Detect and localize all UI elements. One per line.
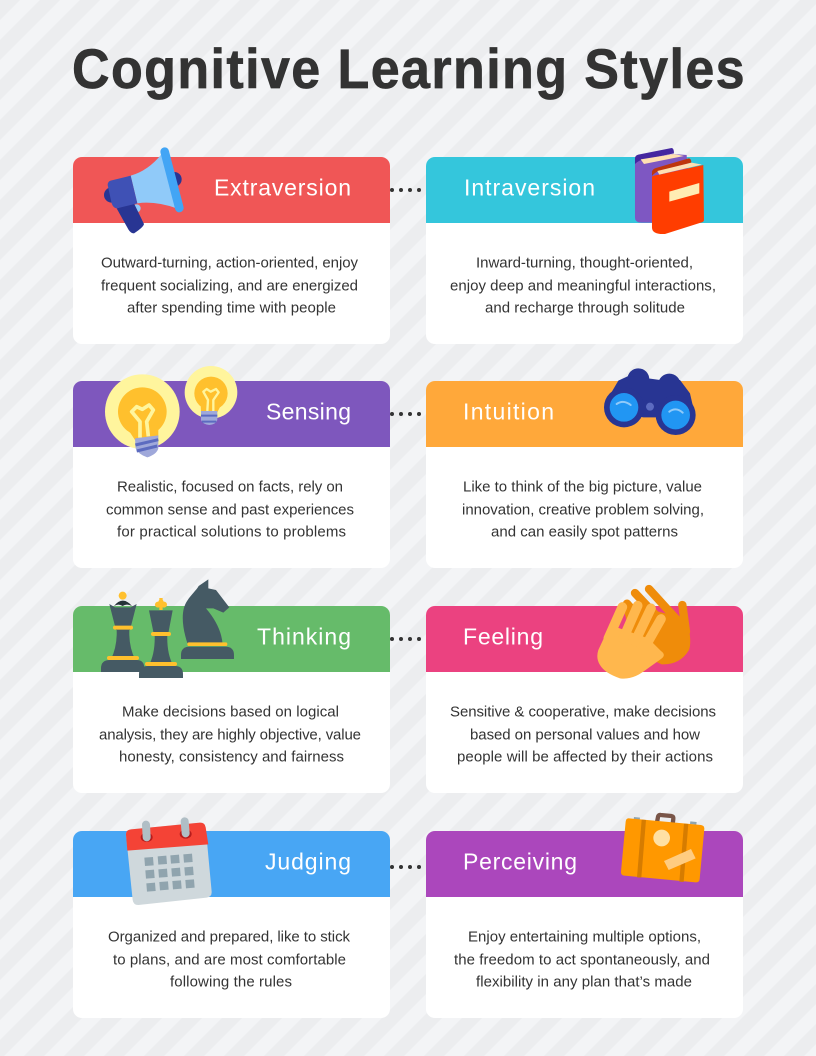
icon: clapping hands	[597, 589, 690, 679]
description: Enjoy entertaining multiple options,	[468, 929, 701, 946]
heading: Thinking	[257, 623, 351, 649]
description: common sense and past experiences	[106, 502, 354, 519]
description: Realistic, focused on facts, rely on	[117, 479, 343, 496]
heading: Feeling	[463, 623, 543, 649]
description: the freedom to act spontaneously, and	[454, 952, 710, 969]
description	[108, 929, 350, 991]
icon: binoculars	[604, 368, 696, 435]
heading: Intuition	[463, 398, 554, 424]
title: Cognitive Learning Styles	[72, 37, 746, 100]
heading: Intraversion	[464, 174, 595, 200]
description: after spending time with people	[127, 300, 336, 317]
description: Sensitive & cooperative, make decisions	[450, 704, 716, 721]
description: Inward-turning, thought-oriented,	[476, 255, 693, 272]
description: innovation, creative problem solving,	[462, 502, 704, 519]
connector: row 4	[390, 865, 421, 869]
icon: megaphone	[104, 152, 182, 233]
panel: Feeling	[426, 589, 743, 793]
description: Like to think of the big picture, value	[463, 479, 702, 496]
panel: Intraversion	[426, 148, 743, 344]
icon: light bulbs	[105, 366, 237, 457]
description: and can easily spot patterns	[491, 524, 678, 541]
description	[450, 704, 716, 766]
description: honesty, consistency and fairness	[119, 749, 344, 766]
description	[454, 929, 710, 991]
heading: Perceiving	[463, 848, 577, 874]
description: based on personal values and how	[470, 727, 700, 744]
heading: Sensing	[266, 398, 351, 424]
description	[450, 255, 716, 317]
heading: Judging	[265, 848, 351, 874]
connector: row 3	[390, 637, 421, 641]
description: people will be affected by their actions	[457, 749, 713, 766]
panel: Intuition	[426, 368, 743, 568]
description: following the rules	[170, 974, 292, 991]
description: Organized and prepared, like to stick	[108, 929, 350, 946]
description: analysis, they are highly objective, value	[99, 727, 361, 744]
icon: chess pieces	[101, 579, 234, 678]
description: Outward-turning, action-oriented, enjoy	[101, 255, 358, 272]
connector: row 1	[390, 188, 421, 192]
description	[101, 255, 358, 317]
description: for practical solutions to problems	[117, 524, 346, 541]
description: to plans, and are most comfortable	[113, 952, 346, 969]
description	[462, 479, 704, 541]
description: frequent socializing, and are energized	[101, 278, 358, 295]
description: flexibility in any plan that’s made	[476, 974, 692, 991]
icon: calendar	[126, 821, 212, 905]
panel: Judging	[73, 821, 390, 1018]
description: Make decisions based on logical	[122, 704, 339, 721]
connector: row 2	[390, 412, 421, 416]
panel: Thinking	[73, 579, 390, 793]
description	[106, 479, 354, 541]
heading: Extraversion	[214, 174, 351, 200]
description: and recharge through solitude	[485, 300, 685, 317]
description	[99, 704, 361, 766]
panel: Perceiving	[426, 815, 743, 1018]
panel: Extraversion	[73, 152, 390, 344]
panel: Sensing	[73, 366, 390, 568]
icon: books	[635, 148, 704, 234]
icon: suitcase	[621, 815, 704, 882]
description: enjoy deep and meaningful interactions,	[450, 278, 716, 295]
